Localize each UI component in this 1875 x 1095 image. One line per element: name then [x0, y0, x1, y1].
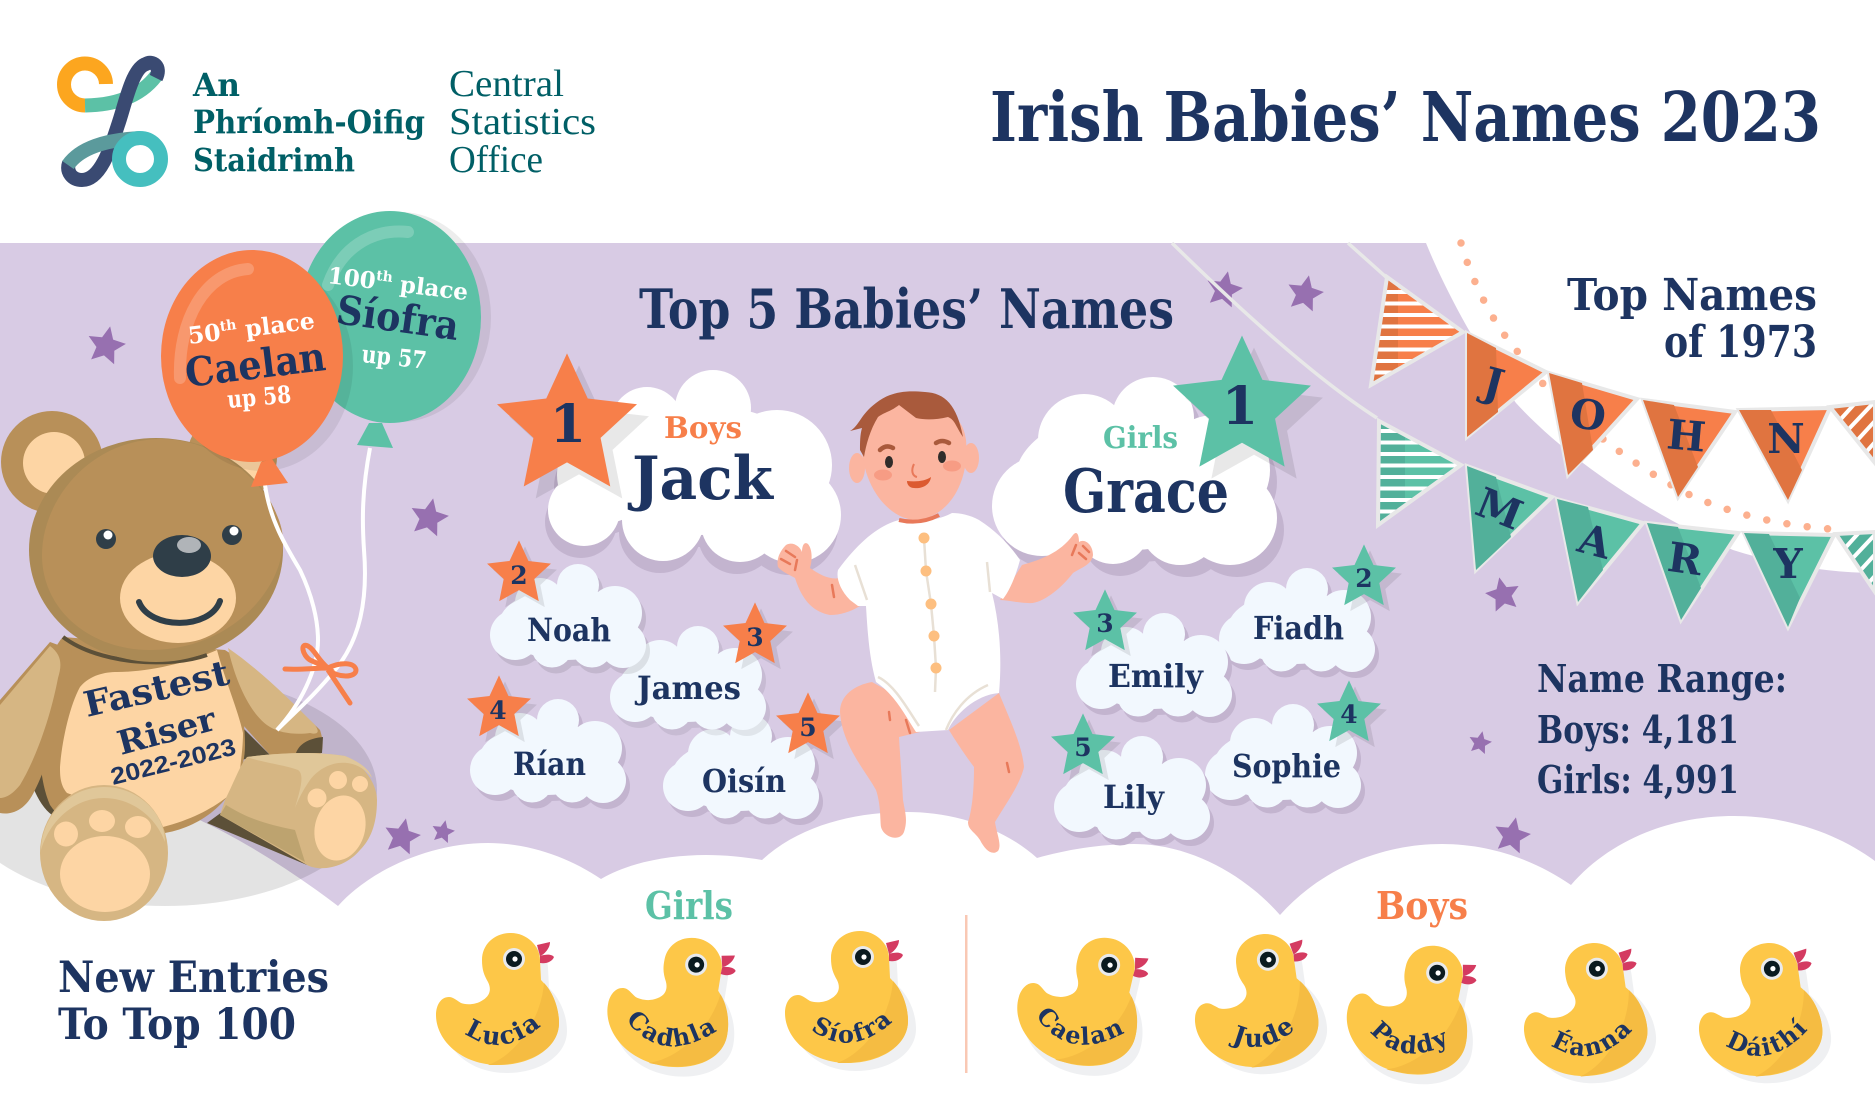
baby buttons: [855, 532, 990, 730]
decorative purple stars: [84, 268, 1534, 856]
bunting letters: John: J: [1475, 357, 1509, 409]
baby arms: [778, 533, 1093, 615]
star 1 boys: [497, 353, 649, 499]
balloon: Siofra: th: [375, 268, 394, 286]
logo wordmark English: [449, 63, 596, 181]
heading: top names of 1973: Top Names: [1567, 270, 1817, 321]
name range text: Girls: 4,991: [1537, 757, 1739, 802]
logo wordmark Irish: [192, 66, 425, 179]
bunting letters: Mary: M: [1469, 478, 1529, 540]
heading: top names of 1973: [1567, 270, 1817, 368]
heading: new entries: New Entries: [58, 953, 329, 1003]
balloon: Siofra: [299, 211, 491, 448]
bunting letters: John: N: [1767, 415, 1805, 463]
cloud: Oisin 5: Oisín: [702, 762, 786, 800]
cloud: Sophie 4: Sophie: [1232, 747, 1341, 785]
cloud: James 3: James: [634, 669, 741, 707]
label girls grace: Grace: [1063, 457, 1229, 527]
balloon: Siofra: place: [390, 270, 470, 306]
duck: Lucia: Lucia: [465, 1018, 541, 1046]
duck: Caelan: Caelan: [1039, 1008, 1124, 1045]
cloud: Noah 2: [487, 540, 650, 674]
bear right leg: [207, 753, 377, 868]
duck: Daithi: Dáithí: [1726, 1016, 1808, 1056]
heading: new entries: To Top 100: [58, 1000, 296, 1050]
cloud: James 3: 3: [746, 623, 764, 652]
duck: Lucia: [436, 933, 567, 1073]
label boys jack: Boys: [664, 411, 742, 446]
bear belly label: Riser: [113, 699, 220, 763]
cloud: Fiadh 2: [1219, 544, 1402, 678]
name range text: Boys: 4,181: [1537, 707, 1739, 752]
bunting strings: [1172, 243, 1386, 418]
cloud: Emily 3: [1073, 589, 1236, 723]
bear right arm: [225, 648, 323, 760]
cloud: James 3: [610, 602, 793, 736]
star 1 girls: 1: [1222, 376, 1258, 437]
heading: top names of 1973: of 1973: [1664, 317, 1817, 368]
baby bodysuit: [838, 513, 1020, 732]
cloud: Oisin 5: [663, 692, 846, 825]
duck: Cadhla: Cadhla: [630, 1012, 717, 1047]
cloud: Lily 5: Lily: [1103, 778, 1165, 816]
bunting letters: John: O: [1567, 389, 1609, 441]
duck: Paddy: [1346, 946, 1476, 1084]
cloud: Sophie 4: 4: [1340, 700, 1358, 729]
duck: Jude: Jude: [1228, 1022, 1293, 1048]
balloon: Caelan: 50: [186, 318, 222, 350]
bear body: [33, 637, 245, 836]
cloud: Noah 2: 2: [510, 561, 528, 590]
duck: Siofra: [785, 931, 916, 1071]
bunting letters: Mary: R: [1665, 533, 1706, 585]
duck: Jude: [1194, 934, 1327, 1074]
cloud: Rian 4: Rían: [513, 745, 586, 783]
cloud: Sophie 4: [1205, 680, 1387, 814]
cloud: Jack: [497, 353, 841, 575]
logo icon: [64, 63, 161, 180]
label boys jack: Jack: [627, 444, 774, 514]
duck: Paddy: Paddy: [1370, 1020, 1446, 1054]
label boys jack: [627, 411, 774, 514]
balloon: Caelan: Caelan: [182, 333, 328, 397]
bear right ear: [187, 412, 277, 502]
divider: [965, 915, 968, 1073]
logo wordmark Irish: An: [192, 66, 240, 104]
balloon: Caelan: th: [219, 317, 237, 335]
logo wordmark English: Office: [449, 139, 543, 181]
bear belly label: 2022-2023: [108, 734, 239, 791]
bear belly label: Fastest: [80, 653, 233, 726]
logo wordmark Irish: Phríomh-Oifig: [193, 103, 425, 141]
bunting letters: John: H: [1665, 410, 1708, 462]
label boys ducks: Boys: [1376, 883, 1468, 928]
duck: Eanna: Éanna: [1551, 1024, 1632, 1056]
label girls grace: Girls: [1103, 421, 1178, 456]
balloon: Caelan: place: [235, 307, 316, 344]
duck: Eanna: [1524, 943, 1656, 1083]
baby legs: [840, 682, 1024, 853]
star 1 girls: [1173, 336, 1323, 479]
baby illustration: [778, 391, 1093, 853]
cloud: Lily 5: [1051, 713, 1214, 846]
logo wordmark Irish: Staidrimh: [193, 141, 355, 179]
bunting: John: [1365, 270, 1875, 500]
duck: Daithi: [1698, 943, 1831, 1083]
balloon: Siofra: 100: [326, 262, 377, 295]
purple background panel: [0, 243, 1875, 1003]
white clouds along bottom: [0, 770, 1875, 1095]
cloud: Rian 4: [467, 675, 630, 809]
name range text: Name Range:: [1537, 656, 1787, 701]
balloon: Caelan: up 58: [226, 380, 292, 414]
star 1 boys: 1: [550, 394, 586, 455]
white corner behind top names: [1426, 243, 1875, 573]
heading: top 5: Top 5 Babies’ Names: [639, 277, 1174, 341]
duck: Siofra: Síofra: [812, 1015, 892, 1043]
teddy bear: [0, 411, 377, 921]
duck: Cadhla: [607, 938, 736, 1076]
balloon: Siofra: up 57: [360, 339, 428, 375]
cloud: Rian 4: 4: [489, 696, 507, 725]
duck: Caelan: [1017, 938, 1148, 1076]
bear left arm: [0, 642, 72, 814]
baby head: [849, 391, 979, 522]
bear belly label: [80, 653, 239, 791]
baby finger marks: [781, 545, 1089, 772]
heading: new entries: [58, 953, 329, 1050]
balloon strings and bow: [265, 448, 370, 730]
balloon: Caelan: [161, 250, 353, 487]
bunting letters: Mary: A: [1572, 514, 1617, 569]
cloud: Emily 3: 3: [1096, 609, 1114, 638]
cloud: Fiadh 2: Fiadh: [1253, 609, 1344, 647]
cloud: Noah 2: Noah: [527, 611, 611, 649]
name range text: [1537, 656, 1787, 802]
bunting letters: John: [1475, 357, 1805, 463]
bear left ear: [1, 411, 103, 513]
cloud: Emily 3: Emily: [1108, 657, 1204, 695]
cloud: Fiadh 2: 2: [1355, 564, 1373, 593]
logo wordmark English: Statistics: [449, 101, 596, 143]
bunting letters: Mary: [1469, 478, 1803, 588]
logo wordmark English: Central: [449, 63, 564, 105]
dotted garland: [1461, 243, 1845, 530]
bunting: Mary: [1375, 415, 1875, 627]
cloud: Grace: [992, 336, 1323, 577]
bunting letters: Mary: Y: [1772, 540, 1803, 588]
label girls grace: [1063, 421, 1229, 527]
cloud: Oisin 5: 5: [799, 713, 817, 742]
cloud: Lily 5: 5: [1074, 733, 1092, 762]
balloon: Siofra: Síofra: [334, 286, 462, 350]
label girls ducks: Girls: [645, 883, 733, 928]
bear shadow: [0, 674, 377, 906]
bear head: [29, 438, 283, 662]
bear front foot: [40, 785, 168, 921]
